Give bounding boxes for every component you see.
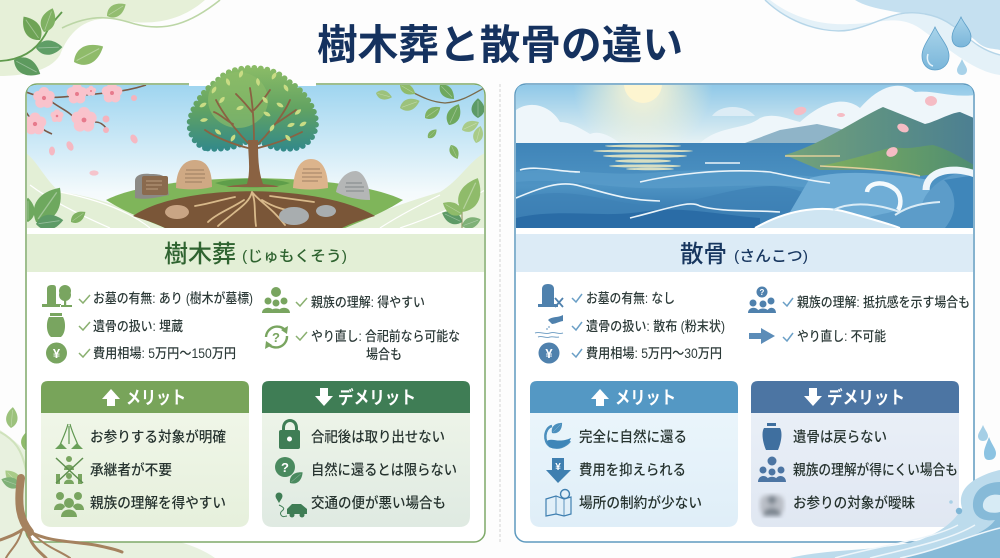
petals — [49, 146, 55, 156]
subheading: 樹木葬 (じゅもくそう) — [27, 234, 484, 272]
icon: question and leaf: ? — [281, 460, 289, 475]
icon: yen coin: ¥ — [53, 346, 61, 361]
facts list: left column: 遺骨の扱い: 散布 (粉末状) — [586, 318, 725, 334]
facts list: right column — [748, 286, 970, 344]
icon: lower cost — [546, 458, 571, 483]
icon: question and leaf — [275, 457, 306, 486]
icon: down arrow — [804, 388, 822, 406]
hills — [26, 153, 167, 228]
icon: yen coin — [46, 342, 67, 364]
decoration: top-right blue wave and water drops — [765, 0, 1000, 75]
icon: praying hands — [55, 424, 83, 449]
card: メリット (樹木葬) — [41, 381, 249, 527]
light wave crests — [516, 163, 830, 218]
right leaf branch — [408, 88, 484, 103]
card: デメリット (樹木葬) — [262, 381, 470, 527]
facts list: left column: 遺骨の扱い: 埋蔵 — [93, 319, 183, 334]
icon: pin and car — [276, 492, 307, 518]
icon: retry question: ? — [272, 330, 280, 345]
foreground waves — [870, 174, 969, 228]
card: メリット (散骨): 費用を抑えられる — [579, 462, 686, 479]
card: デメリット (散骨): デメリット — [827, 387, 905, 408]
card: メリット (散骨): メリット — [615, 388, 676, 408]
card: デメリット (散骨): 遺骨は戻らない — [793, 428, 887, 446]
sun reflection — [593, 144, 693, 170]
card: メリット (散骨): 場所の制約が少ない — [579, 494, 702, 512]
facts list: left column: お墓の有無: なし — [586, 291, 675, 306]
icon: family with question — [748, 286, 776, 313]
facts list: right column: やり直し: 不可能 — [797, 329, 886, 344]
icon: yen coin: ¥ — [545, 346, 553, 361]
icon: family — [262, 287, 290, 313]
subheading: 散骨 (さんこつ): (さんこつ) — [734, 248, 808, 265]
card: デメリット (樹木葬): 交通の便が悪い場合も — [311, 494, 446, 512]
icon: scattering hand — [535, 315, 563, 338]
icon: family — [54, 492, 84, 517]
decoration: top-left green wave and leaves — [0, 0, 220, 81]
card: メリット (散骨) — [530, 381, 738, 527]
icon: blurred figure — [760, 495, 784, 516]
facts list: left column: 費用相場: 5万円〜30万円 — [586, 345, 722, 361]
icon: yen coin — [538, 342, 560, 364]
icon: urn — [47, 313, 65, 337]
decoration: bottom-left green wash and leaves — [0, 407, 215, 558]
grave stones — [135, 174, 169, 199]
card: デメリット (樹木葬): 合祀後は取り出せない — [311, 429, 445, 446]
icon: padlock — [279, 419, 300, 449]
panel: 散骨 — [514, 83, 975, 543]
ground — [106, 178, 403, 228]
card: メリット (樹木葬): メリット — [126, 388, 186, 408]
icon: up arrow — [591, 389, 609, 406]
icon: down arrow — [315, 388, 333, 406]
distant mountains — [745, 124, 842, 143]
facts list: right column: 親族の理解: 得やすい — [311, 294, 425, 310]
subheading: 樹木葬 (じゅもくそう): (じゅもくそう) — [242, 248, 347, 265]
card: デメリット (散骨): 親族の理解が得にくい場合も — [793, 461, 958, 479]
cherry branch — [26, 85, 146, 134]
green mountains — [785, 107, 974, 170]
facts list: right column: 場合も — [366, 346, 402, 362]
icon: up arrow — [102, 389, 120, 406]
icon: one-way arrow — [749, 328, 775, 344]
icon: map and pin — [546, 490, 571, 516]
facts list: left column — [42, 285, 253, 364]
facts list: left column: 費用相場: 5万円〜150万円 — [93, 345, 236, 361]
icon: no successor — [56, 456, 83, 484]
icon: lower cost: ¥ — [555, 462, 561, 473]
card: メリット (樹木葬): 承継者が不要 — [90, 461, 172, 479]
icon: family with question: ? — [760, 288, 765, 297]
facts list: right column — [262, 287, 460, 362]
card: メリット (散骨): 完全に自然に還る — [579, 429, 687, 446]
sea — [515, 143, 975, 229]
subheading: 散骨 (さんこつ) — [516, 234, 973, 272]
card: メリット (樹木葬): お参りする対象が明確 — [90, 428, 226, 446]
facts list: left column — [535, 284, 725, 364]
icon: retry question — [265, 326, 288, 349]
sakura petals — [793, 96, 937, 159]
facts list: left column: お墓の有無: あり (樹木が墓標) — [93, 290, 253, 306]
illustration: ocean and mountains — [516, 85, 973, 228]
illustration: tree and graves — [21, 68, 487, 231]
icon: worried family — [758, 456, 786, 482]
card: デメリット (樹木葬): デメリット — [338, 387, 416, 408]
tree — [189, 68, 316, 187]
subheading: 樹木葬 (じゅもくそう): 樹木葬 — [164, 241, 236, 268]
card: デメリット (散骨) — [751, 381, 959, 527]
icon: urn — [763, 423, 781, 450]
icon: grave and tree — [42, 285, 72, 307]
clouds — [516, 86, 975, 143]
icon: no grave — [538, 284, 563, 307]
facts list: right column: 親族の理解: 抵抗感を示す場合も — [797, 294, 970, 310]
swells — [516, 170, 813, 188]
panel: 樹木葬 — [21, 68, 487, 542]
title: 樹木葬と散骨の違い — [317, 22, 683, 68]
subheading: 散骨 (さんこつ): 散骨 — [680, 241, 727, 268]
card: デメリット (散骨): お参りの対象が曖昧 — [793, 494, 915, 512]
decoration: bottom-right wave and drops — [790, 425, 1000, 558]
panel divider — [499, 84, 501, 543]
buried stones — [165, 205, 189, 219]
roots — [195, 192, 314, 226]
decoration: bottom-left tree roots — [0, 478, 122, 558]
card: デメリット (樹木葬): 自然に還るとは限らない — [311, 462, 457, 479]
icon: nature and wave — [545, 420, 571, 449]
card: メリット (樹木葬): 親族の理解を得やすい — [90, 495, 226, 512]
facts list: right column: やり直し: 合祀前なら可能な — [311, 328, 460, 344]
